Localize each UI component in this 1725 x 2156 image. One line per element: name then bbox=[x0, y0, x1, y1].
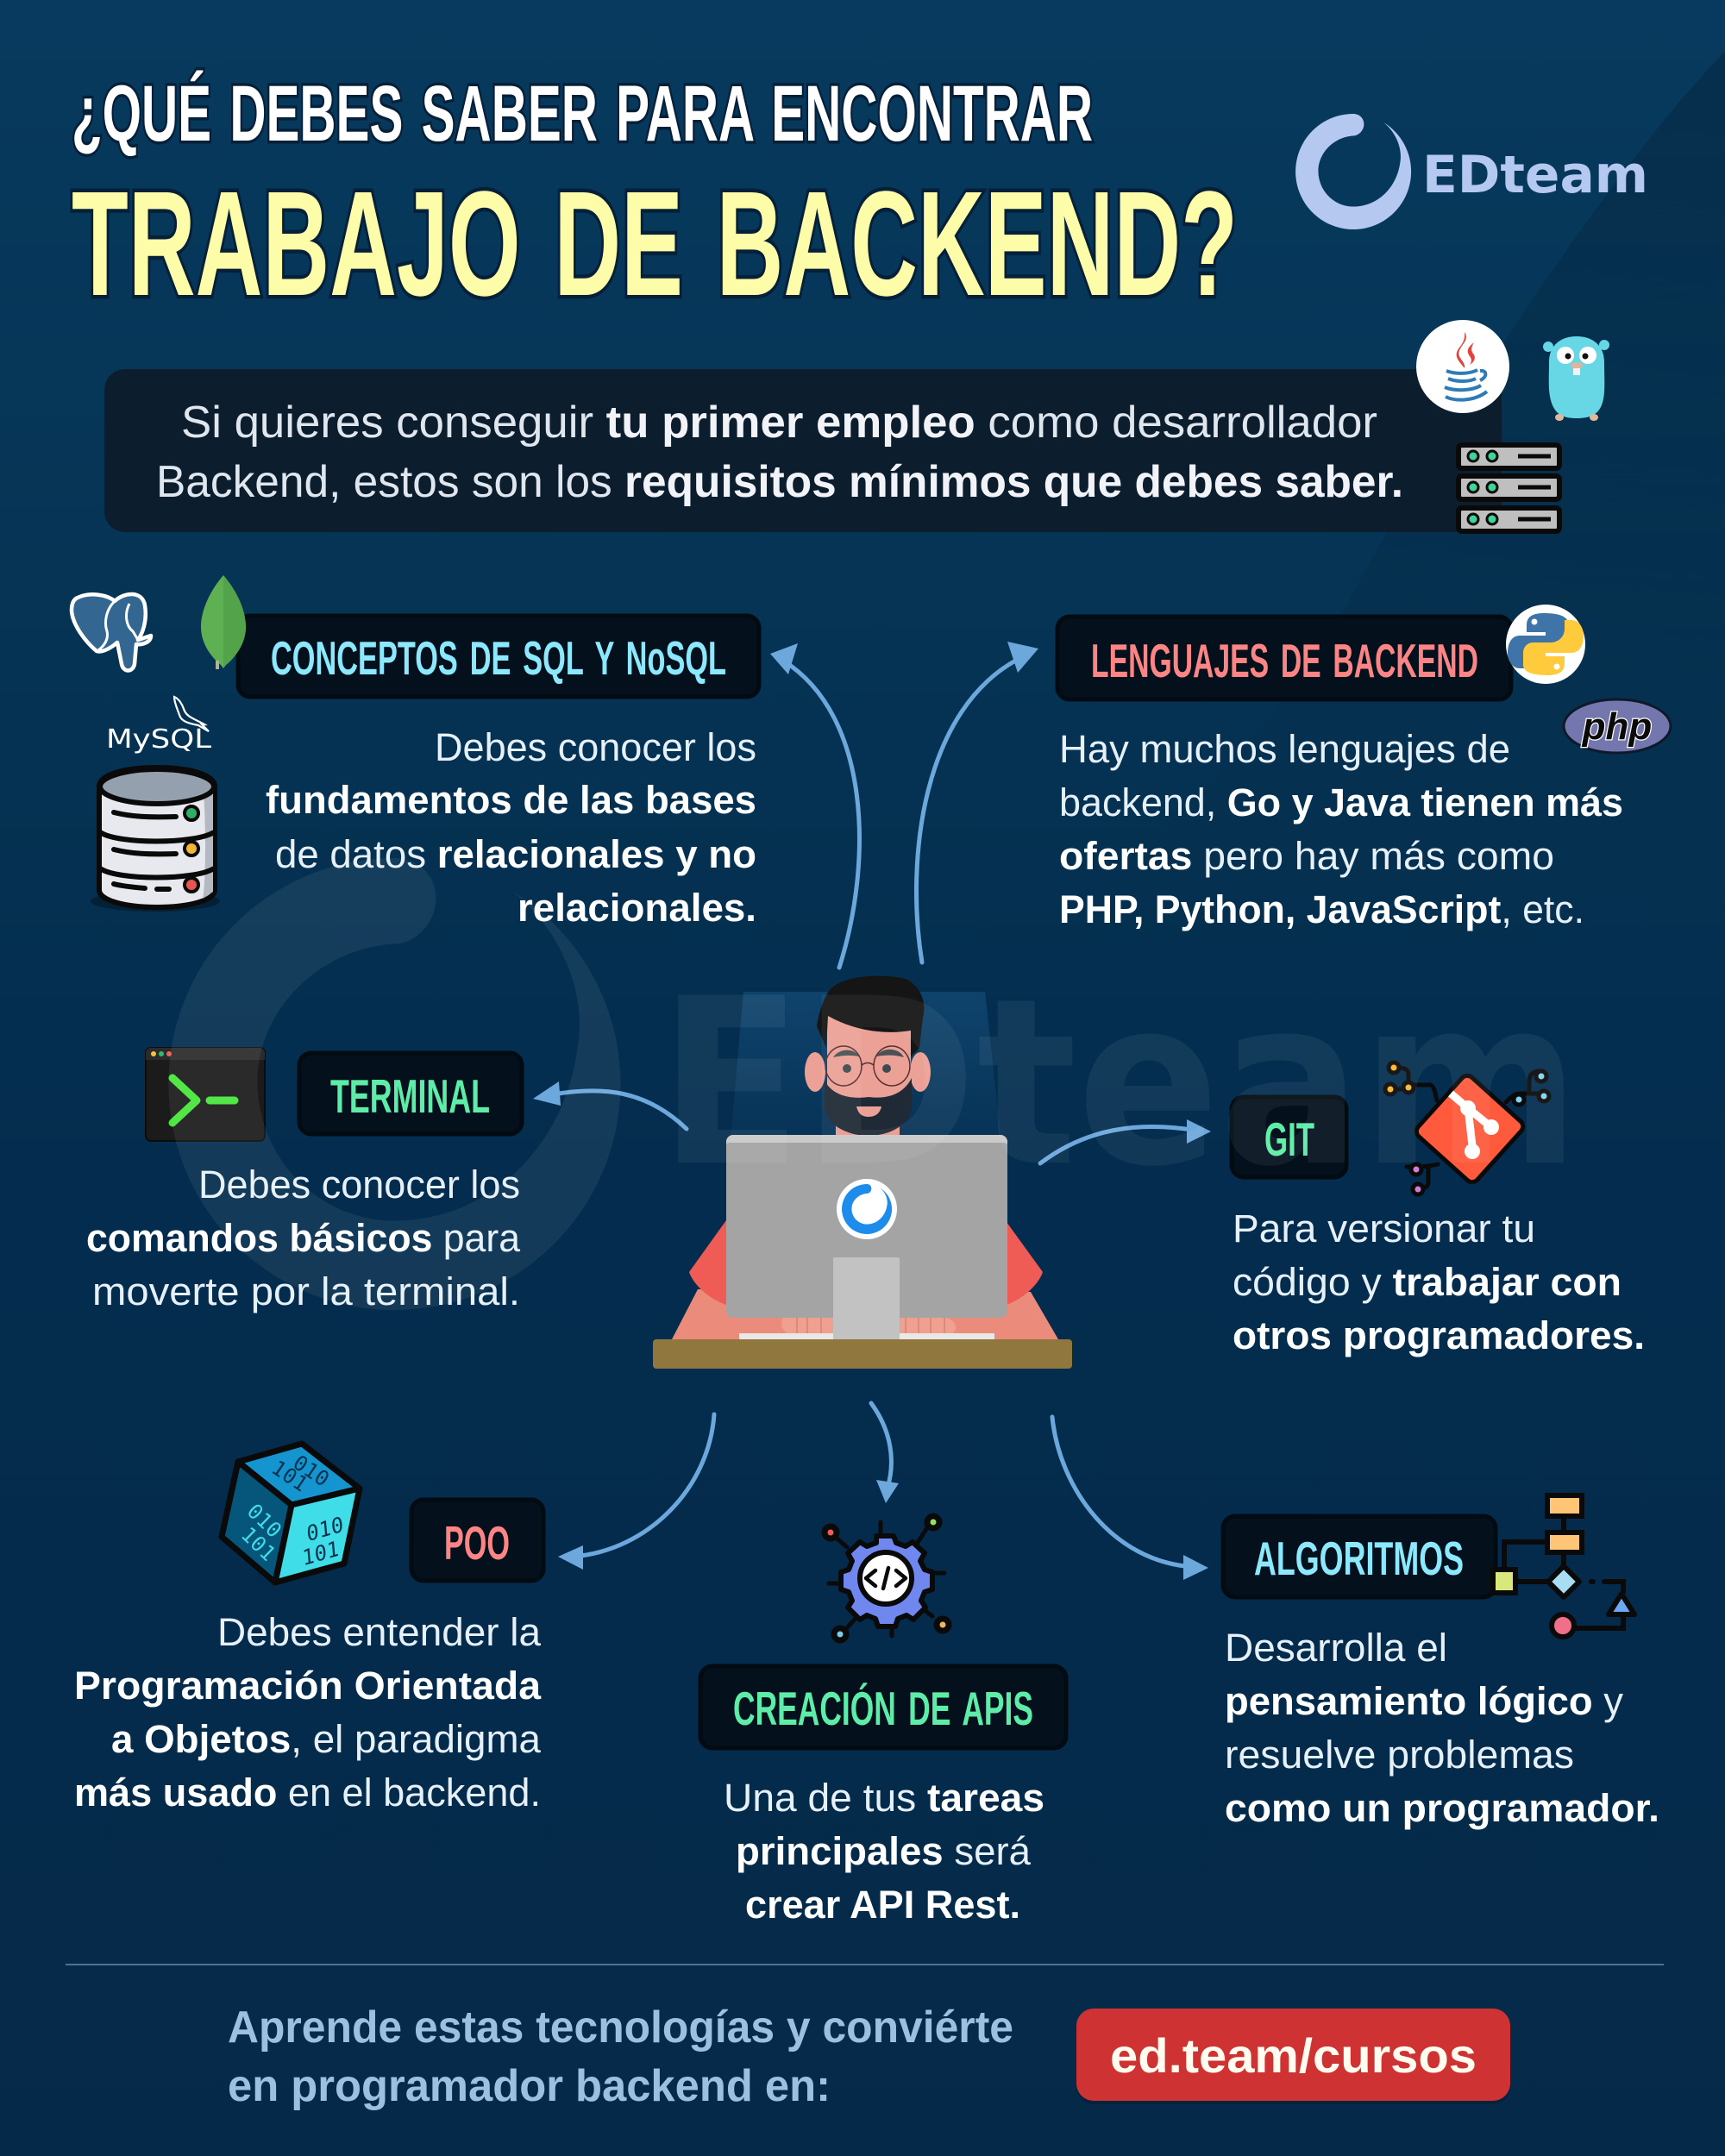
button bbox=[1076, 2009, 1510, 2104]
icon: java bbox=[1416, 320, 1509, 413]
arrow: to APIs bbox=[871, 1403, 899, 1503]
arrow: to POO bbox=[558, 1414, 714, 1570]
icon: cube: 101 bbox=[236, 1522, 280, 1566]
text: APIs: principales será bbox=[736, 1829, 1032, 1873]
logo on monitor bbox=[837, 1179, 897, 1239]
icon: cube: 010 bbox=[242, 1499, 286, 1543]
icon: cube: 101 bbox=[267, 1456, 312, 1497]
face bbox=[827, 1013, 911, 1134]
keyboard bbox=[739, 1333, 994, 1339]
watermark: EDteam logo: EDteam bbox=[659, 949, 1580, 1217]
arrow: to SQL bbox=[770, 643, 859, 968]
text: POO: a Objetos, el paradigma bbox=[111, 1717, 542, 1761]
icon: terminal bbox=[146, 1048, 265, 1141]
icon: go gopher bbox=[1543, 336, 1609, 421]
text: git: otros programadores. bbox=[1233, 1313, 1645, 1357]
icon: cube: 101 bbox=[299, 1537, 342, 1570]
icon: mongodb leaf bbox=[201, 575, 246, 669]
illustration: developer bbox=[653, 976, 1072, 1369]
heading: algoritmos: ALGORITMOS bbox=[1254, 1532, 1464, 1585]
text: APIs: crear API Rest. bbox=[745, 1883, 1020, 1927]
arrow: to algoritmos bbox=[1052, 1417, 1208, 1580]
panel: APIs bbox=[700, 1516, 1066, 1927]
eyes bbox=[843, 1064, 851, 1073]
panel: POO bbox=[74, 1444, 543, 1814]
icon: flowchart bbox=[1493, 1495, 1634, 1637]
text: SQL: relacionales. bbox=[518, 886, 756, 930]
text: terminal: moverte por la terminal. bbox=[92, 1269, 520, 1313]
title bbox=[72, 69, 1238, 327]
intro line 2: Backend, estos son los requisitos mínimos que debes saber. bbox=[156, 457, 1403, 507]
desk bbox=[653, 1339, 1072, 1369]
text: lenguajes: PHP, Python, JavaScript, etc. bbox=[1059, 887, 1584, 931]
heading: git: GIT bbox=[1264, 1112, 1314, 1166]
heading: git bbox=[1232, 1097, 1346, 1177]
text: APIs bbox=[724, 1776, 1044, 1927]
monitor bbox=[726, 1135, 1007, 1318]
panel: terminal bbox=[86, 1048, 522, 1313]
heading: SQL bbox=[238, 616, 759, 697]
icon: php bbox=[1564, 699, 1671, 753]
heading: lenguajes bbox=[1057, 617, 1511, 699]
logo: EDteam bbox=[1295, 114, 1648, 229]
heading: lenguajes: LENGUAJES DE BACKEND bbox=[1091, 634, 1478, 687]
logo: EDteam: EDteam bbox=[1422, 145, 1648, 205]
icon: python bbox=[1506, 605, 1585, 684]
icon: database bbox=[91, 768, 220, 912]
text: algoritmos: como un programador. bbox=[1225, 1786, 1659, 1830]
shirt bbox=[689, 1220, 1043, 1305]
text: algoritmos: resuelve problemas bbox=[1225, 1733, 1574, 1777]
text: POO: Programación Orientada bbox=[74, 1664, 542, 1708]
text: algoritmos: Desarrolla el bbox=[1225, 1626, 1447, 1670]
text: POO bbox=[74, 1610, 542, 1814]
beard bbox=[825, 1078, 912, 1136]
panel: SQL bbox=[72, 575, 759, 930]
footer text: en programador backend en: bbox=[228, 2061, 831, 2111]
footer text bbox=[228, 2002, 1013, 2111]
arrow: to git bbox=[1040, 1119, 1211, 1163]
arms bbox=[672, 1289, 1058, 1339]
button: ed.team/cursos bbox=[1110, 2028, 1477, 2083]
icon: cube: 010 bbox=[289, 1451, 334, 1492]
title line 1: ¿QUÉ DEBES SABER PARA ENCONTRAR bbox=[72, 69, 1093, 158]
heading: terminal: TERMINAL bbox=[330, 1069, 490, 1123]
watermark: EDteam logo bbox=[168, 858, 1580, 1310]
text: lenguajes bbox=[1059, 727, 1623, 931]
text: POO: más usado en el backend. bbox=[74, 1771, 541, 1814]
stand bbox=[833, 1257, 900, 1340]
text: lenguajes: backend, Go y Java tienen más bbox=[1059, 780, 1623, 824]
text: terminal: comandos básicos para bbox=[86, 1216, 521, 1260]
icon: servers bbox=[1458, 445, 1559, 531]
panel: lenguajes bbox=[1057, 605, 1671, 931]
footer text: Aprende estas tecnologías y conviérte bbox=[228, 2002, 1013, 2053]
neck bbox=[836, 1112, 900, 1147]
icon: cube bbox=[222, 1444, 360, 1583]
intro line 1: Si quieres conseguir tu primer empleo como desarrollador bbox=[181, 398, 1377, 448]
hands bbox=[781, 1318, 956, 1333]
text: git: código y trabajar con bbox=[1233, 1260, 1622, 1304]
heading: algoritmos bbox=[1223, 1516, 1496, 1597]
arrow: to lenguajes bbox=[916, 642, 1038, 962]
heading: APIs bbox=[700, 1666, 1066, 1748]
icon: git bbox=[1385, 1062, 1549, 1194]
icon: php: php bbox=[1582, 705, 1652, 748]
panel: algoritmos bbox=[1223, 1495, 1659, 1830]
heading: POO bbox=[411, 1500, 543, 1581]
text: APIs: Una de tus tareas bbox=[724, 1776, 1044, 1820]
text: SQL: de datos relacionales y no bbox=[275, 832, 756, 876]
text: algoritmos bbox=[1225, 1626, 1659, 1830]
icon: gear bbox=[825, 1516, 949, 1640]
text: git bbox=[1233, 1206, 1645, 1357]
hair bbox=[817, 976, 924, 1056]
text: terminal bbox=[86, 1163, 521, 1313]
icon: mysql bbox=[106, 697, 211, 755]
panel: intro bbox=[104, 369, 1502, 532]
mouth bbox=[856, 1106, 881, 1117]
text: lenguajes: Hay muchos lenguajes de bbox=[1059, 727, 1510, 771]
heading: SQL: CONCEPTOS DE SQL Y NoSQL bbox=[271, 631, 726, 685]
icon: postgresql bbox=[72, 594, 151, 671]
arrow: to terminal bbox=[533, 1081, 687, 1129]
glasses bbox=[825, 1046, 910, 1086]
footer: call to action bbox=[228, 2002, 1510, 2111]
text: algoritmos: pensamiento lógico y bbox=[1225, 1679, 1623, 1723]
text: terminal: Debes conocer los bbox=[198, 1163, 520, 1206]
icon: cube: 010 bbox=[304, 1513, 347, 1546]
text: SQL bbox=[266, 725, 756, 930]
icon: mysql: MySQL bbox=[106, 724, 211, 755]
screen glow bbox=[726, 992, 1007, 1190]
text: POO: Debes entender la bbox=[217, 1610, 542, 1654]
ears bbox=[805, 1052, 931, 1092]
brows bbox=[833, 1050, 904, 1057]
panel: git bbox=[1232, 1062, 1645, 1357]
text: SQL: Debes conocer los bbox=[435, 725, 756, 769]
text: SQL: fundamentos de las bases bbox=[266, 778, 756, 822]
heading: terminal bbox=[299, 1053, 522, 1134]
text: lenguajes: ofertas pero hay más como bbox=[1059, 834, 1554, 878]
heading: POO: POO bbox=[444, 1516, 510, 1570]
heading: APIs: CREACIÓN DE APIS bbox=[733, 1682, 1033, 1735]
text: git: Para versionar tu bbox=[1233, 1206, 1535, 1250]
